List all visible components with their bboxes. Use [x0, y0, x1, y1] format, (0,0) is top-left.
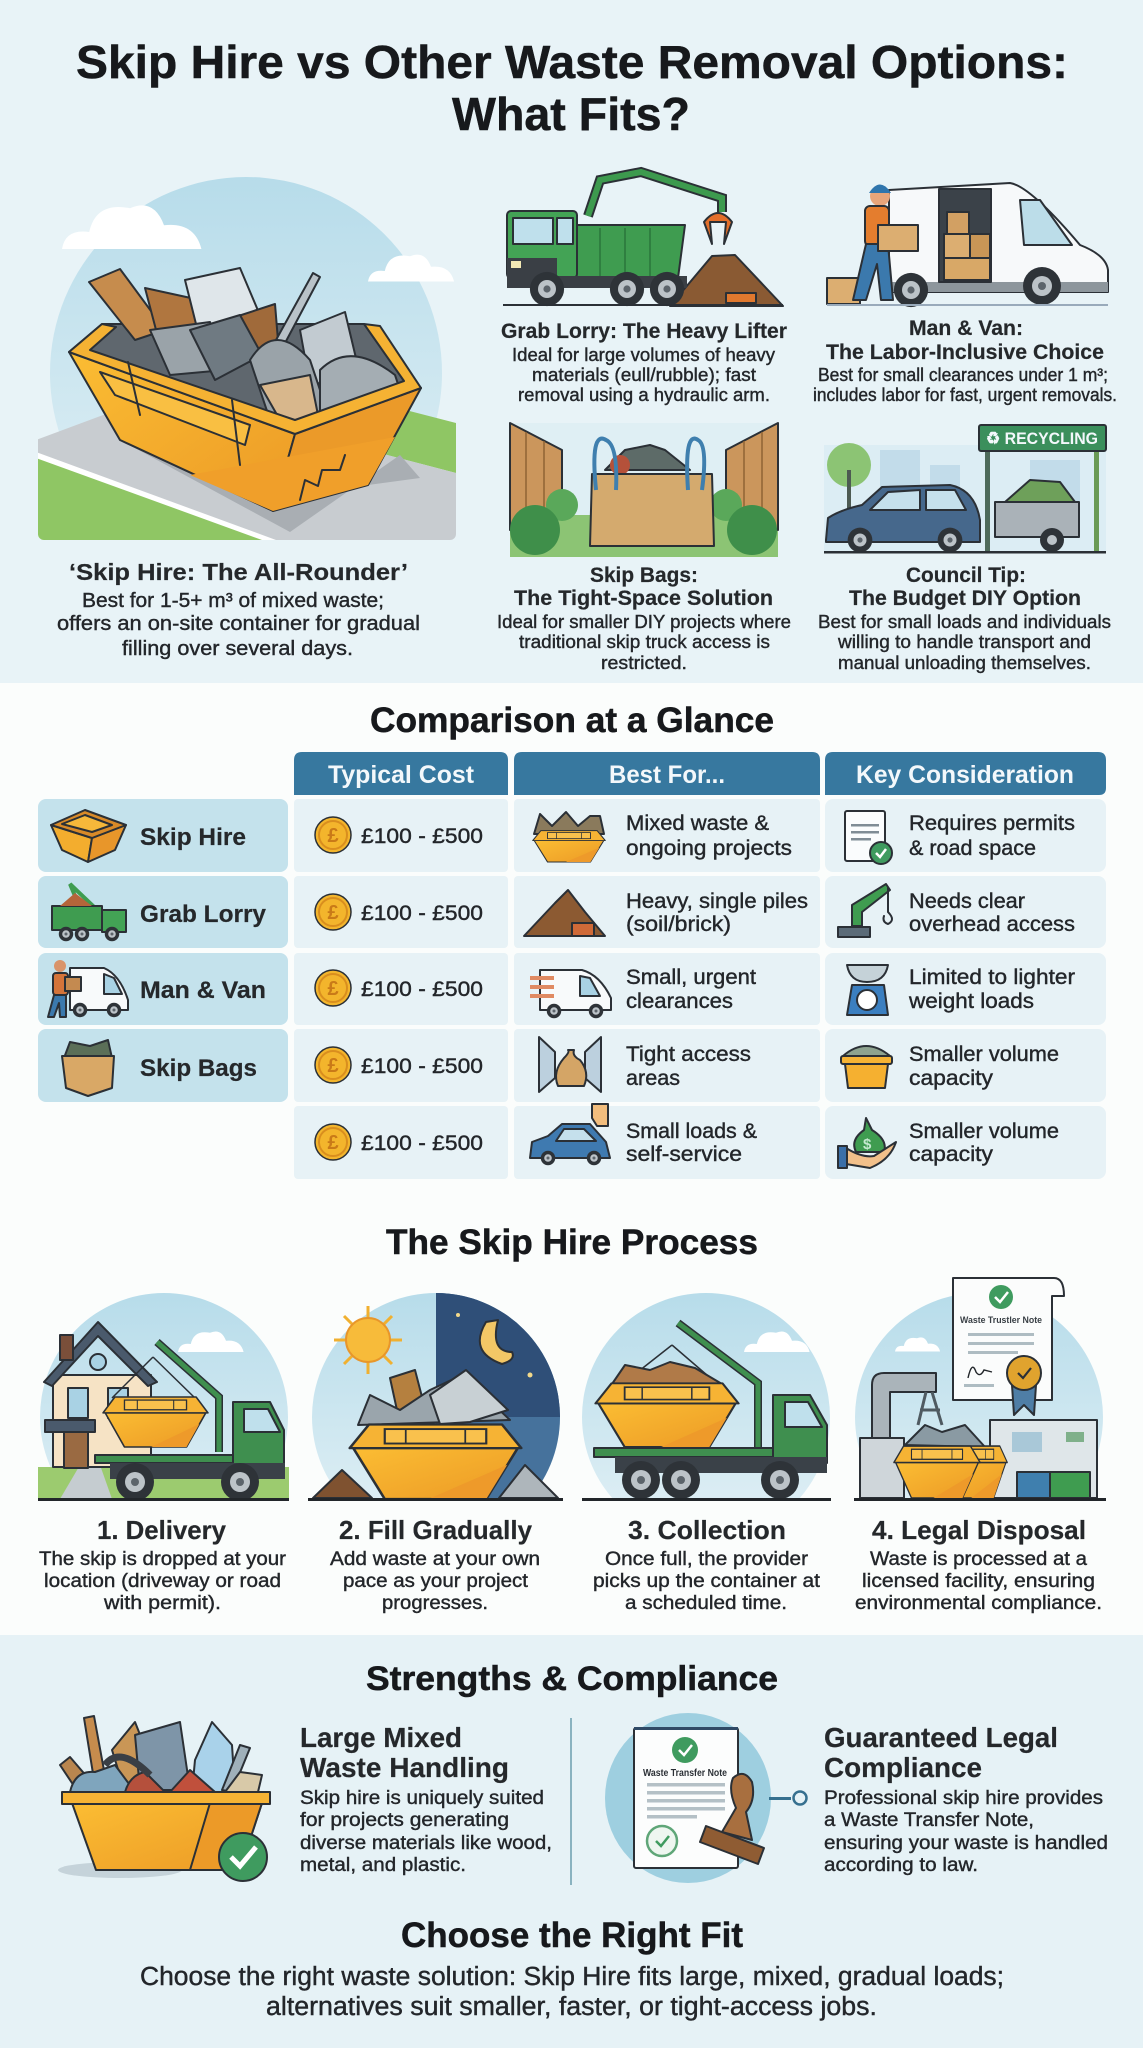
typical cost column: £100 - £500: [361, 901, 483, 925]
text: skip hire description: filling over several days.: [122, 638, 353, 660]
text: skip hire description: offers an on-site container for gradual: [57, 613, 420, 635]
icon: skip bag: [62, 1040, 114, 1096]
text: council tip description: Best for small loads and individuals: [818, 611, 1111, 632]
illustration: waste transfer note and stamp: Waste Transfer Note: [643, 1768, 727, 1779]
panel: grab lorry: [501, 172, 787, 405]
text: council tip description: [818, 611, 1111, 673]
icon: crane arm: [838, 884, 892, 937]
waste transfer note document: Waste Trustler Note: [960, 1315, 1042, 1326]
heading: large mixed waste handling: Large Mixed: [300, 1722, 462, 1753]
typical cost column: £100 - £500: [361, 824, 483, 848]
step description: with permit).: [103, 1592, 221, 1614]
step description: pace as your project: [343, 1570, 529, 1592]
best for text: self-service: [626, 1143, 742, 1166]
icon: skip: [51, 810, 126, 862]
text: council tip description: manual unloading themselves.: [838, 652, 1091, 673]
typical cost column: [315, 817, 483, 1160]
heading: guaranteed legal compliance: Compliance: [824, 1752, 982, 1783]
title: Skip Hire vs Other Waste Removal Options:: [76, 36, 1068, 88]
illustration: grab lorry and soil pile: [503, 172, 783, 306]
conclusion text: Choose the right waste solution: Skip Hire fits large, mixed, gradual loads;: [140, 1963, 1004, 1991]
best for text: Mixed waste &: [626, 812, 769, 835]
heading: the skip hire process: The Skip Hire Process: [386, 1223, 758, 1262]
process step 1: delivery: [38, 1293, 289, 1614]
heading: man and van: The Labor-Inclusive Choice: [826, 341, 1104, 364]
heading: man and van: Man & Van:: [909, 317, 1023, 340]
key consideration text: Limited to lighter: [909, 966, 1075, 989]
icon: skip with mixed waste: [533, 812, 605, 862]
illustration: delivery truck at house: [38, 1293, 289, 1498]
step description: [39, 1548, 287, 1614]
process step 4: legal disposal: [854, 1278, 1106, 1614]
row label text: Grab Lorry: [140, 901, 266, 928]
ground line: [582, 1498, 831, 1501]
key consideration text: weight loads: [908, 990, 1034, 1013]
step description: The skip is dropped at your: [39, 1548, 287, 1570]
table header row: Best For...: [609, 761, 725, 789]
best for text: Heavy, single piles: [626, 890, 808, 913]
section background: comparison and process: [0, 683, 1143, 1635]
row label text: Skip Bags: [140, 1055, 257, 1082]
illustration: truck collecting full skip: [582, 1293, 830, 1498]
section background: strengths and conclusion: [0, 1635, 1143, 2048]
recycling sign: ♻ RECYCLING: [986, 429, 1098, 448]
text: legal compliance description: a Waste Transfer Note,: [824, 1809, 1034, 1831]
heading: strengths and compliance: Strengths & Compliance: [366, 1660, 778, 1698]
title: [76, 36, 1068, 140]
icon: bag in tight access: [539, 1037, 601, 1092]
panel: large mixed waste handling: [58, 1716, 552, 1881]
best for column: [524, 812, 808, 1166]
illustration: waste transfer note and stamp: [605, 1713, 806, 1883]
best for text: (soil/brick): [626, 913, 731, 936]
best for text: [626, 812, 808, 1166]
heading: large mixed waste handling: Waste Handling: [300, 1752, 509, 1783]
key consideration text: [908, 812, 1075, 1166]
heading: guaranteed legal compliance: [824, 1722, 1058, 1783]
best for text: Small, urgent: [626, 966, 756, 989]
waste transfer note document: [953, 1278, 1064, 1415]
step description: a scheduled time.: [625, 1592, 787, 1614]
illustration: skip with mixed waste and check: [58, 1716, 270, 1881]
process step 2: fill gradually: [308, 1293, 563, 1614]
text: skip hire description: Best for 1-5+ m³ of mixed waste;: [82, 590, 384, 612]
heading: skip bags: [514, 564, 773, 610]
step description: environmental compliance.: [855, 1592, 1102, 1614]
step description: progresses.: [382, 1592, 488, 1614]
comparison table: [38, 752, 1106, 1179]
icon: man and van: [48, 960, 128, 1017]
best for text: Small loads &: [626, 1120, 757, 1143]
heading: skip bags: Skip Bags:: [590, 564, 698, 587]
step description: location (driveway or road: [44, 1570, 281, 1592]
panel: council tip: [818, 425, 1111, 673]
panel: guaranteed legal compliance: [605, 1713, 1108, 1883]
typical cost column: £100 - £500: [361, 1131, 483, 1155]
step title: 2. Fill Gradually: [339, 1515, 533, 1545]
icon: money bag in hand: [838, 1118, 896, 1168]
row labels: [38, 799, 288, 1102]
panel: skip hire the all-rounder: [36, 177, 456, 660]
best for text: clearances: [626, 990, 733, 1013]
key consideration column: [838, 811, 1075, 1168]
heading: large mixed waste handling: [300, 1722, 509, 1783]
step title: 4. Legal Disposal: [872, 1515, 1086, 1545]
step description: [855, 1548, 1102, 1614]
heading: council tip: Council Tip:: [906, 564, 1026, 587]
icon: soil and bricks pile: [524, 890, 605, 936]
text: legal compliance description: Professional skip hire provides: [824, 1787, 1103, 1809]
step description: Once full, the provider: [605, 1548, 809, 1570]
step description: Add waste at your own: [330, 1548, 540, 1570]
heading: guaranteed legal compliance: Guaranteed Legal: [824, 1722, 1058, 1753]
illustration: skip bag in narrow space: [510, 423, 778, 557]
heading: grab lorry: Grab Lorry: The Heavy Lifter: [501, 320, 787, 343]
row label text: [140, 824, 266, 1082]
ground line: [854, 1498, 1106, 1501]
table cell backgrounds: [294, 799, 1106, 1179]
step description: licensed facility, ensuring: [862, 1570, 1095, 1592]
heading: comparison at a glance: Comparison at a Glance: [370, 701, 774, 740]
text: council tip description: willing to handle transport and: [837, 631, 1091, 652]
text: skip bags description: traditional skip truck access is: [519, 631, 770, 652]
ground line: [38, 1498, 289, 1501]
key consideration text: capacity: [909, 1067, 994, 1090]
step description: picks up the container at: [593, 1570, 821, 1592]
text: man and van description: Best for small clearances under 1 m³;: [818, 365, 1108, 385]
row label text: Man & Van: [140, 977, 266, 1004]
text: grab lorry description: [512, 344, 776, 405]
illustration: car and trailer at recycling centre: [824, 425, 1106, 554]
text: skip bags description: [497, 611, 791, 673]
illustration: licensed facility and note: [855, 1277, 1103, 1498]
text: large mixed waste description: for projects generating: [300, 1809, 509, 1831]
best for text: ongoing projects: [626, 837, 792, 860]
typical cost column: £100 - £500: [361, 977, 483, 1001]
icon: small bin: [841, 1046, 892, 1088]
step title: 3. Collection: [628, 1515, 786, 1545]
table header row: [294, 752, 1106, 795]
icon: permit document: [845, 811, 892, 864]
text: skip bags description: Ideal for smaller DIY projects where: [497, 611, 791, 632]
text: large mixed waste description: diverse materials like wood,: [300, 1832, 552, 1854]
ground line: [308, 1498, 563, 1501]
text: man and van description: includes labor for fast, urgent removals.: [813, 385, 1117, 405]
icon: weighing scale: [847, 965, 888, 1015]
key consideration text: Smaller volume: [909, 1120, 1059, 1143]
illustration: skip on driveway: [36, 177, 456, 569]
key consideration text: Requires permits: [909, 812, 1075, 835]
key consideration text: Needs clear: [909, 890, 1025, 913]
heading: skip hire all-rounder: ‘Skip Hire: The All-Rounder’: [69, 559, 408, 585]
panel: man and van: [813, 183, 1117, 405]
text: skip hire description: [57, 590, 420, 660]
heading: choose the right fit: Choose the Right Fit: [401, 1916, 743, 1955]
text: man and van description: [813, 365, 1117, 405]
typical cost column: £100 - £500: [361, 1054, 483, 1078]
step description: [593, 1548, 821, 1614]
icon: car with hand: [530, 1104, 610, 1165]
best for text: Tight access: [626, 1043, 751, 1066]
key consideration text: Smaller volume: [909, 1043, 1059, 1066]
best for text: areas: [626, 1067, 680, 1090]
illustration: skip filling day to night: [312, 1293, 560, 1498]
text: large mixed waste description: Skip hire is uniquely suited: [300, 1787, 544, 1809]
table header row: Key Consideration: [856, 761, 1074, 789]
key consideration text: capacity: [909, 1143, 994, 1166]
panel divider: [570, 1718, 572, 1885]
key consideration text: & road space: [909, 837, 1036, 860]
conclusion text: [140, 1963, 1004, 2021]
process step 3: collection: [582, 1293, 831, 1614]
text: legal compliance description: ensuring your waste is handled: [824, 1832, 1108, 1854]
text: grab lorry description: removal using a hydraulic arm.: [518, 384, 770, 405]
panel: skip bags: [497, 423, 791, 673]
row label text: Skip Hire: [140, 824, 246, 851]
text: legal compliance description: according to law.: [824, 1854, 978, 1876]
section background: top options: [0, 0, 1143, 683]
step description: [330, 1548, 540, 1614]
text: grab lorry description: materials (eull/rubble); fast: [532, 364, 756, 385]
heading: man and van: [826, 317, 1104, 364]
heading: council tip: The Budget DIY Option: [849, 587, 1081, 610]
illustration: man loading van: [827, 183, 1108, 307]
title: What Fits?: [452, 88, 690, 140]
key consideration text: overhead access: [909, 913, 1075, 936]
text: legal compliance description: [824, 1787, 1108, 1876]
heading: skip bags: The Tight-Space Solution: [514, 587, 773, 610]
text: skip bags description: restricted.: [601, 652, 687, 673]
icon: money bag in hand: $: [863, 1136, 872, 1153]
heading: council tip: [849, 564, 1081, 610]
icon: grab lorry: [52, 884, 126, 941]
text: grab lorry description: Ideal for large volumes of heavy: [512, 344, 776, 365]
table header row: Typical Cost: [328, 761, 475, 789]
text: large mixed waste description: [300, 1787, 552, 1876]
step title: 1. Delivery: [97, 1515, 227, 1545]
icon: fast van: [530, 970, 611, 1018]
recycling sign: [979, 425, 1106, 451]
text: large mixed waste description: metal, and plastic.: [300, 1854, 466, 1876]
step description: Waste is processed at a: [870, 1548, 1087, 1570]
conclusion text: alternatives suit smaller, faster, or tight-access jobs.: [266, 1993, 877, 2021]
